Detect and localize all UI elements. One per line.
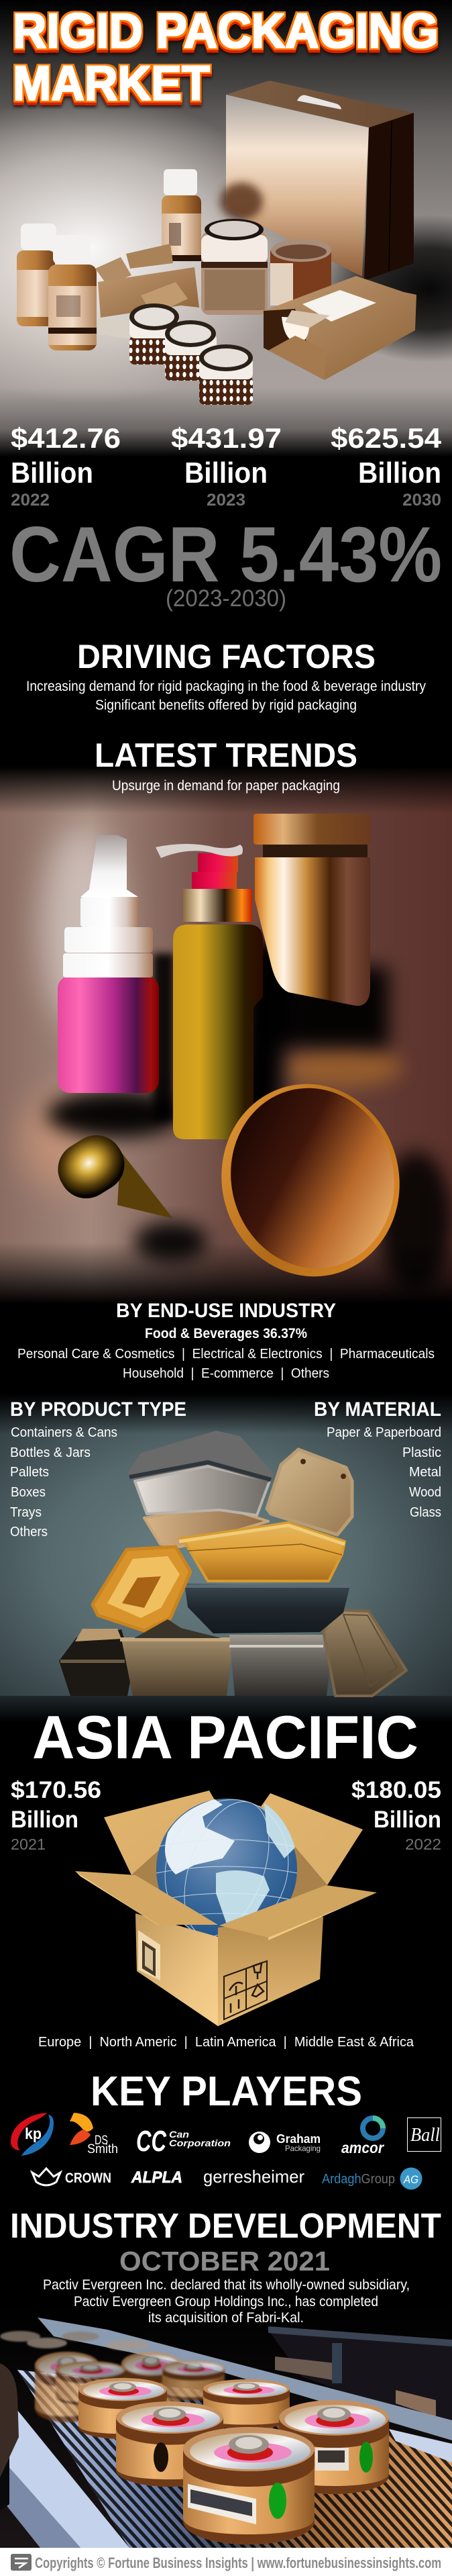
belt <box>17 2370 452 2548</box>
stat 2030: 2030 <box>402 491 441 510</box>
front can <box>183 2427 315 2544</box>
hero photo: packaging products <box>0 0 452 457</box>
stat 2023: $431.97 <box>171 422 282 454</box>
logo: kp <box>11 2113 54 2156</box>
by end-use industry: Household | E-commerce | Others <box>123 1366 329 1381</box>
logo: amcor <box>341 2118 384 2156</box>
by product type: Trays <box>10 1505 42 1520</box>
by material <box>314 1398 441 1520</box>
gold cap <box>48 1125 173 1219</box>
logo: Ball: Ball <box>410 2125 440 2146</box>
back row cans <box>0 2331 225 2422</box>
driving factors: Significant benefits offered by rigid packaging <box>95 698 357 713</box>
industry development: its acquisition of Fabri-Kal. <box>148 2310 304 2326</box>
by product type: Containers & Cans <box>11 1425 117 1440</box>
logo: Can Corporation: CC <box>136 2125 167 2158</box>
region stat 2022 <box>351 1777 441 1853</box>
tan cube <box>267 1449 352 1535</box>
by product type: Boxes <box>11 1485 46 1500</box>
logo: Graham Packaging: Graham <box>276 2132 321 2146</box>
large jar <box>201 219 268 315</box>
region stat 2021: Billion <box>11 1807 78 1833</box>
containers photo <box>0 1394 452 1723</box>
region stat 2022: 2022 <box>405 1835 441 1853</box>
pink bottle <box>58 835 159 1093</box>
stat 2030 <box>331 422 442 510</box>
industry development: Pactiv Evergreen Group Holdings Inc., has completed <box>74 2294 378 2309</box>
latest trends <box>95 736 357 794</box>
logo: Can Corporation <box>136 2125 231 2158</box>
by end-use industry <box>17 1300 435 1381</box>
icon: Fortune Business Insights logo <box>11 2554 32 2571</box>
driving factors: Increasing demand for rigid packaging in the food & beverage industry <box>26 679 426 694</box>
logo: DS Smith <box>70 2113 118 2156</box>
logo: Crown: CROWN <box>65 2170 111 2186</box>
stat 2023 <box>171 422 282 510</box>
by material: Metal <box>409 1465 441 1480</box>
logo: Ardagh Group: AG <box>403 2173 418 2186</box>
by product type: Bottles & Jars <box>10 1445 91 1460</box>
grey container <box>129 1432 272 1515</box>
by product type: BY PRODUCT TYPE <box>10 1398 186 1421</box>
left bottle <box>17 224 56 326</box>
right rail <box>38 2318 452 2440</box>
dark bowl <box>184 1584 350 1633</box>
small cardboard boxes <box>95 244 199 339</box>
logo: Gerresheimer: gerresheimer <box>203 2166 304 2187</box>
driving factors: DRIVING FACTORS <box>77 638 376 675</box>
gold pump bottle <box>156 844 263 1139</box>
trends photo: cosmetic containers <box>0 767 452 1304</box>
logo: amcor: amcor <box>341 2139 384 2156</box>
logo: DS Smith: DS <box>95 2134 108 2148</box>
black container <box>59 1629 133 1696</box>
small dotted jars <box>129 303 253 405</box>
stat 2022: Billion <box>11 457 93 489</box>
tan box right <box>323 1610 406 1696</box>
orange tray <box>93 1547 190 1631</box>
logo: Crown <box>32 2168 111 2186</box>
stat 2023: Billion <box>184 457 268 489</box>
gold ring lid <box>201 1065 420 1296</box>
stat 2022 <box>11 422 121 510</box>
stat 2023: 2023 <box>207 491 245 510</box>
tan tub <box>144 1506 268 1547</box>
other regions: Europe | North Americ | Latin America | Middle East & Africa <box>38 2035 414 2050</box>
metal bowl <box>229 1635 330 1696</box>
by material: BY MATERIAL <box>314 1398 441 1421</box>
back bottle <box>162 169 201 261</box>
glass jar <box>270 239 331 305</box>
CAGR: (2023-2030) <box>166 585 286 612</box>
key player logos <box>11 2113 441 2190</box>
logo: Ardagh Group <box>322 2167 422 2190</box>
latest trends: Upsurge in demand for paper packaging <box>112 778 340 794</box>
region stat 2021: $170.56 <box>11 1777 101 1803</box>
by material: Paper & Paperboard <box>327 1425 441 1440</box>
market size stats <box>11 422 442 510</box>
logo: kp: kp <box>25 2125 42 2142</box>
kraft box <box>220 81 414 281</box>
asia pacific heading: ASIA PACIFIC <box>32 1704 418 1772</box>
title: MARKET <box>13 56 210 111</box>
key players heading: KEY PLAYERS <box>91 2068 362 2115</box>
by product type <box>10 1398 186 1539</box>
stat 2022: $412.76 <box>11 422 121 454</box>
by end-use industry: Food & Beverages 36.37% <box>145 1326 307 1341</box>
logo: Ardagh Group: ArdaghGroup <box>322 2172 395 2187</box>
gold jar <box>253 814 371 1006</box>
logo: DS Smith: Smith <box>87 2142 118 2156</box>
footer <box>0 2548 452 2576</box>
title: RIGID PACKAGING <box>13 4 439 58</box>
region stat 2022: Billion <box>374 1807 441 1833</box>
driving factors <box>26 638 426 713</box>
stat 2030: $625.54 <box>331 422 442 454</box>
logo: Graham Packaging <box>249 2132 321 2153</box>
logo: Can Corporation: Can <box>169 2129 189 2140</box>
industry development: INDUSTRY DEVELOPMENT <box>10 2207 441 2246</box>
industry development: OCTOBER 2021 <box>119 2246 330 2277</box>
stat 2030: Billion <box>358 457 441 489</box>
by product type: Pallets <box>10 1465 49 1480</box>
by material: Plastic <box>402 1445 441 1460</box>
left figure <box>0 2363 19 2511</box>
debris <box>134 1619 221 1638</box>
logo: Ball <box>408 2117 441 2151</box>
logo: Can Corporation: Corporation <box>169 2138 231 2148</box>
kraft bag with label <box>264 276 416 380</box>
latest trends: LATEST TRENDS <box>95 736 357 774</box>
stat 2022: 2022 <box>11 491 50 510</box>
conveyor photo <box>0 2303 452 2548</box>
icon: globe in cardboard box <box>75 1782 377 2026</box>
QR label <box>138 1930 160 1981</box>
by material: Glass <box>410 1505 441 1520</box>
by end-use industry: Personal Care & Cosmetics | Electrical & Electronics | Pharmaceuticals <box>17 1347 435 1362</box>
front bottle <box>48 235 97 350</box>
machinery <box>268 2326 452 2430</box>
industry development <box>10 2207 441 2326</box>
tan tub bottom <box>120 1637 235 1696</box>
logo: Graham Packaging: Packaging <box>285 2144 321 2153</box>
title <box>13 4 439 111</box>
orange tub <box>179 1523 345 1581</box>
middle row cans <box>78 2378 389 2494</box>
by material: Wood <box>409 1485 441 1500</box>
industry development: Pactiv Evergreen Inc. declared that its wholly-owned subsidiary, <box>43 2277 410 2293</box>
region stat 2021: 2021 <box>11 1835 46 1853</box>
globe <box>146 1782 307 1956</box>
by end-use industry: BY END-USE INDUSTRY <box>116 1300 336 1322</box>
logo: Alpla: ALPLA <box>131 2168 182 2187</box>
by product type: Others <box>10 1525 48 1539</box>
region stat 2022: $180.05 <box>351 1777 441 1803</box>
region stat 2021 <box>11 1777 101 1853</box>
left rail <box>0 2410 129 2548</box>
handling symbols <box>224 1961 267 2019</box>
